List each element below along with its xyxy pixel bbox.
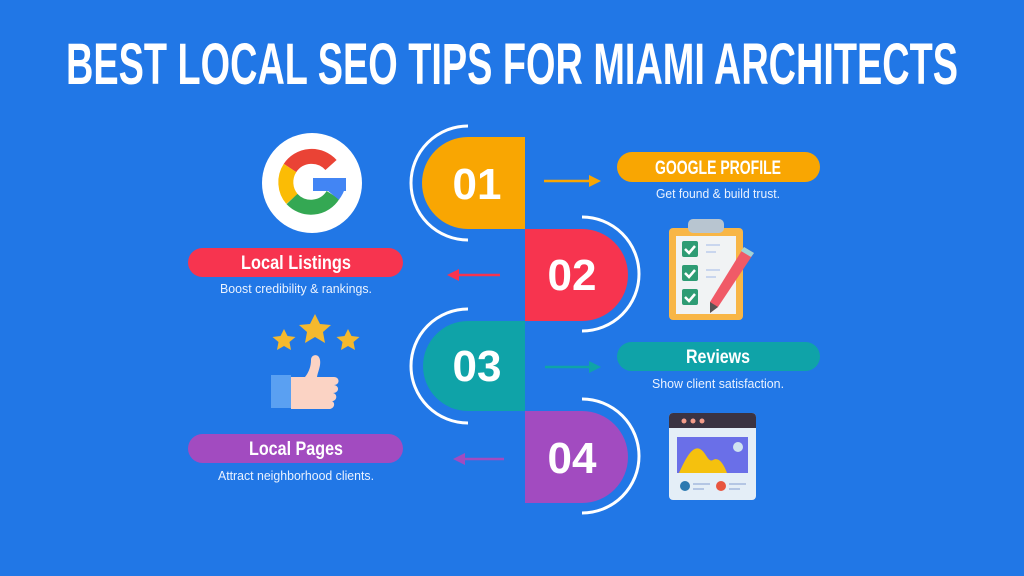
callout: local listings (188, 248, 403, 296)
callout: google profile: GOOGLE PROFILE (655, 158, 781, 179)
step 01 (411, 126, 525, 240)
icon: stars and thumbs up (271, 314, 360, 409)
callout: local pages: Local Pages (249, 439, 343, 460)
step 02: 02 (548, 251, 596, 300)
step 04 (525, 399, 639, 513)
step 02 (525, 217, 639, 331)
callout: reviews (617, 342, 820, 391)
step 03: 03 (453, 342, 501, 391)
callout: google profile: Get found & build trust. (656, 186, 780, 201)
arrow 04 (453, 453, 504, 465)
callout: local pages (188, 434, 403, 483)
step 01: 01 (453, 160, 501, 209)
callout: reviews: Reviews (686, 347, 750, 368)
arrow 03 (545, 361, 601, 373)
callout: google profile (617, 152, 820, 201)
step 03 (411, 309, 525, 423)
icon: google logo (262, 133, 362, 233)
callout: local listings: Local Listings (241, 253, 351, 274)
callout: local listings: Boost credibility & rankings. (220, 281, 372, 296)
callout: local pages: Attract neighborhood clients. (218, 468, 374, 483)
step 04: 04 (548, 434, 597, 483)
arrow 01 (544, 175, 601, 187)
icon: browser window (669, 413, 756, 500)
arrow 02 (447, 269, 500, 281)
callout: reviews: Show client satisfaction. (652, 376, 784, 391)
icon: clipboard checklist (669, 219, 754, 320)
